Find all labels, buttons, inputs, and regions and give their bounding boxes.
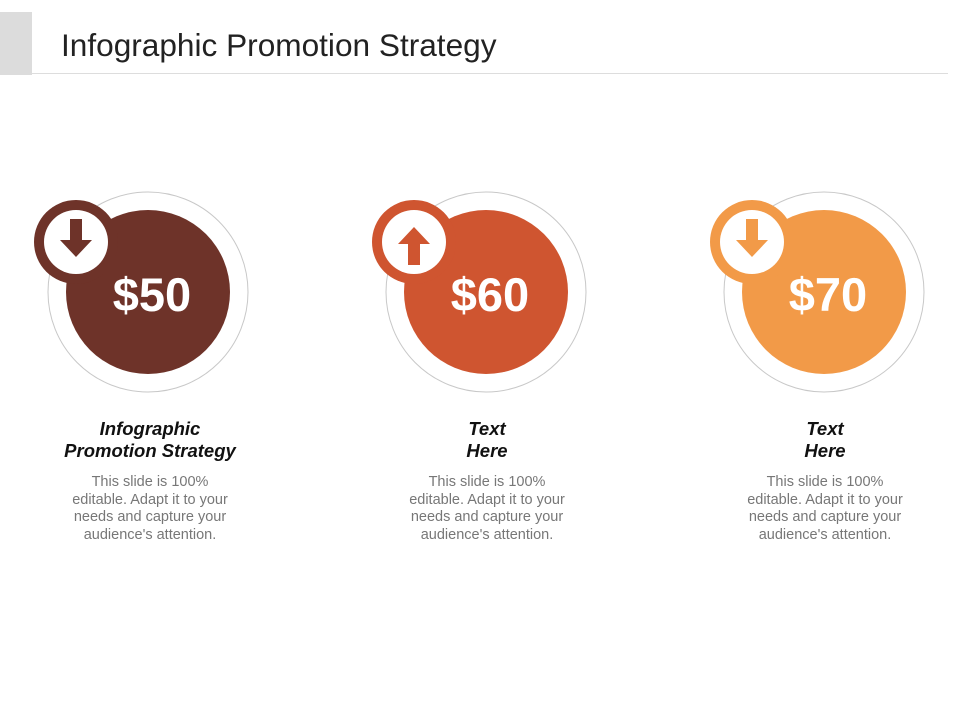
- item 1 heading: Infographic: [100, 418, 200, 439]
- title: Infographic Promotion Strategy: [61, 27, 497, 63]
- item 1 heading: Promotion Strategy: [64, 440, 236, 461]
- item 1 description: This slide is 100%: [92, 474, 208, 490]
- item 2 heading: Here: [466, 440, 508, 461]
- item 3 description: editable. Adapt it to your: [747, 492, 903, 508]
- item 2 description: editable. Adapt it to your: [409, 492, 565, 508]
- item 2 circle: [372, 192, 586, 392]
- item 1 heading: [64, 418, 236, 461]
- item 2 description: audience's attention.: [421, 526, 553, 542]
- item 3 description: audience's attention.: [759, 526, 891, 542]
- item 3 heading: Here: [804, 440, 846, 461]
- item 1 circle: [34, 192, 248, 392]
- item 3 circle: [710, 192, 924, 392]
- item 1 description: editable. Adapt it to your: [72, 492, 228, 508]
- item 2 description: needs and capture your: [411, 509, 563, 525]
- item 3 heading: Text: [806, 418, 844, 439]
- item 2 description: This slide is 100%: [429, 474, 545, 490]
- item 2 circle: $60: [451, 268, 529, 321]
- item 1 description: audience's attention.: [84, 526, 216, 542]
- item 3 description: This slide is 100%: [767, 474, 883, 490]
- header accent block: [0, 12, 32, 75]
- item 2 heading: [466, 418, 508, 461]
- item 1 description: [72, 474, 228, 542]
- item 2 description: [409, 474, 565, 542]
- item 3 heading: [804, 418, 846, 461]
- item 2 heading: Text: [468, 418, 506, 439]
- item 3 circle: $70: [789, 268, 867, 321]
- item 3 description: needs and capture your: [749, 509, 901, 525]
- item 1 description: needs and capture your: [74, 509, 226, 525]
- item 3 description: [747, 474, 903, 542]
- item 1 circle: $50: [113, 268, 191, 321]
